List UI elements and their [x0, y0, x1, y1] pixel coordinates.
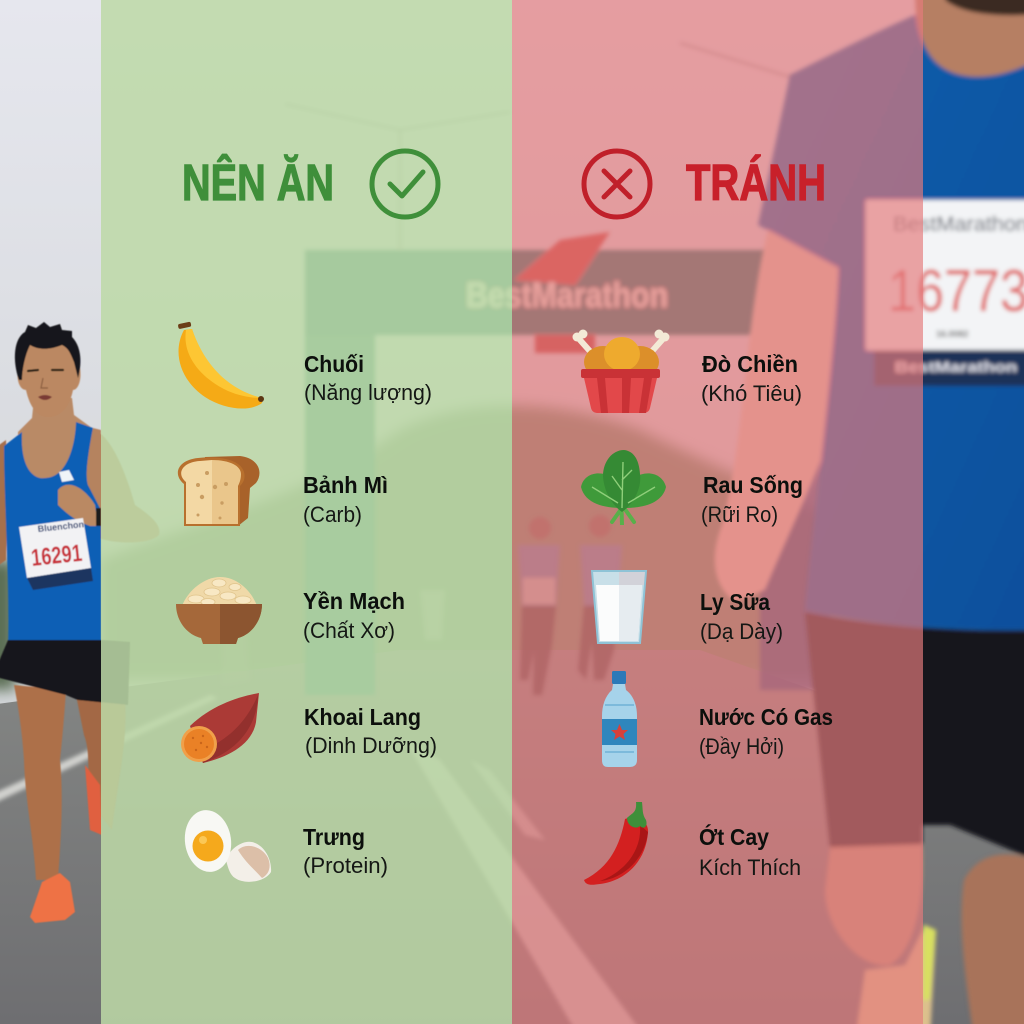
text: Khoai Lang — [304, 704, 437, 758]
text: Nước Có Gas — [699, 704, 833, 759]
heading: NÊN ĂN: NÊN ĂN — [182, 153, 334, 211]
icon: glass of milk — [592, 571, 646, 643]
text: Khoai Lang: Khoai Lang — [304, 704, 421, 730]
left foreground runner — [0, 322, 159, 923]
icon: chili pepper — [584, 802, 648, 885]
text: Trưng: (Protein) — [303, 853, 388, 878]
text: Rau Sống: (Rữi Ro) — [701, 502, 778, 527]
text: Chuối: (Năng lượng) — [304, 380, 432, 405]
text: Ớt Cay: Kích Thích — [699, 855, 801, 880]
panel: red TRÁNH column — [512, 0, 923, 1024]
text: Bảnh Mì: (Carb) — [303, 502, 362, 527]
text: Đò Chiền: Đò Chiền — [702, 351, 798, 377]
text: Nước Có Gas: (Đầy Hởi) — [699, 734, 784, 759]
icon: boiled egg — [181, 807, 271, 882]
distant runners — [220, 515, 622, 695]
text: Yến Mạch: Yền Mạch — [303, 588, 405, 614]
icon: bread — [178, 456, 259, 526]
text: Chuối — [304, 351, 432, 405]
text: Yến Mạch: (Chất Xơ) — [303, 618, 395, 643]
text: Ớt Cay: Ớt Cay — [699, 823, 769, 850]
text: Bảnh Mì: Bảnh Mì — [303, 472, 388, 498]
icon: sweet potato — [181, 693, 259, 763]
text: Ly Sữa: (Dạ Dày) — [700, 619, 783, 644]
panel: green NÊN ĂN column — [101, 0, 512, 1024]
text: Trưng — [303, 824, 388, 878]
text: Chuối: Chuối — [304, 351, 364, 377]
icon: banana — [178, 322, 264, 409]
text: Ly Sữa — [700, 589, 783, 644]
text: Khoai Lang: (Dinh Dưỡng) — [305, 733, 437, 758]
icon: green check circle — [372, 151, 438, 217]
text: Rau Sống: Rau Sống — [703, 472, 803, 498]
big foreground runner: BestMarathon — [893, 213, 1024, 236]
heading: TRÁNH: TRÁNH — [686, 154, 826, 211]
text: Đò Chiền — [701, 351, 802, 406]
text: Ly Sữa: Ly Sữa — [700, 589, 770, 615]
left foreground runner: Bluenchon — [37, 519, 84, 534]
text: Yến Mạch — [303, 588, 405, 643]
left foreground runner: 16291 — [30, 540, 83, 572]
text: Bảnh Mì — [303, 472, 388, 527]
big foreground runner: 16.0082 — [936, 329, 969, 339]
text: Nước Có Gas: Nước Có Gas — [699, 704, 833, 730]
icon: spinach — [581, 450, 666, 525]
text: Trưng: Trưng — [303, 824, 365, 850]
text: Rau Sống — [701, 472, 803, 527]
big foreground runner: BestMarathon — [895, 359, 1017, 376]
text: Ớt Cay — [699, 823, 801, 880]
icon: fried chicken bucket — [572, 330, 670, 413]
icon: water bottle — [602, 671, 637, 767]
icon: oat bowl — [176, 577, 262, 644]
background photo: marathon road scene: BestMarathon — [466, 276, 668, 315]
text: Đò Chiền: (Khó Tiêu) — [701, 381, 802, 406]
icon: red cross circle — [584, 151, 650, 217]
big foreground runner — [715, 0, 1024, 1024]
